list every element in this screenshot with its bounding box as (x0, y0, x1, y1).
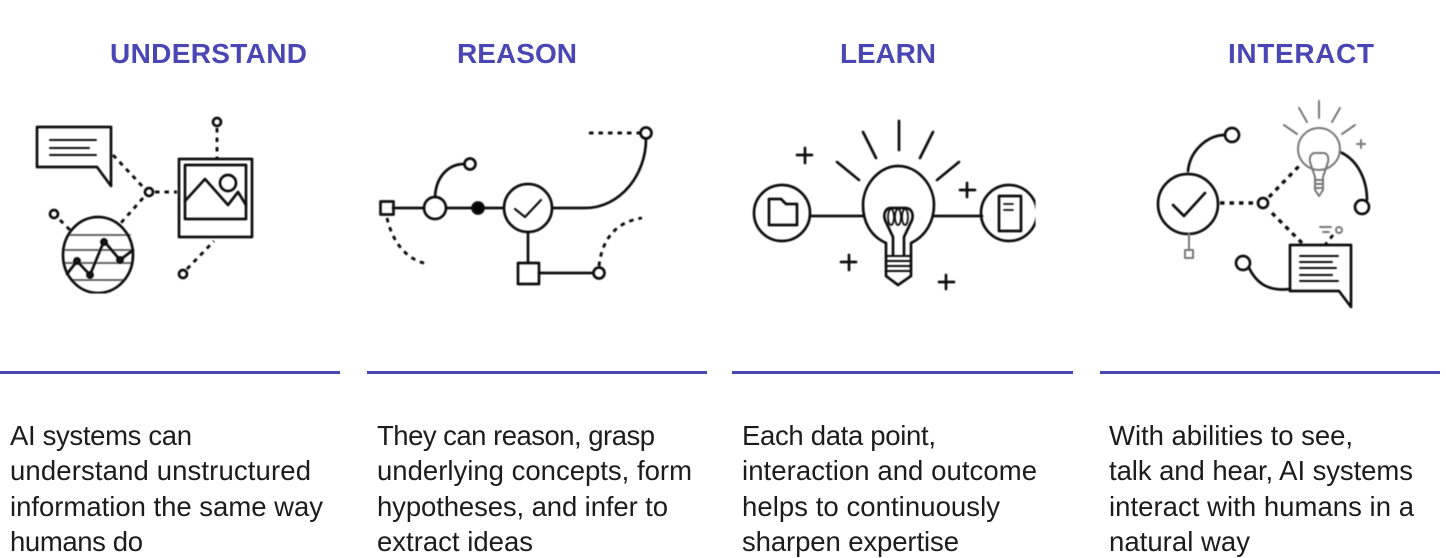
text: understand description (10, 420, 323, 557)
divider: learn (732, 371, 1073, 374)
text: understand description: AI systems can (10, 420, 192, 451)
text: reason description: underlying concepts, form (377, 455, 692, 486)
text: reason description: They can reason, grasp (377, 420, 655, 451)
text: reason description: extract ideas (377, 526, 533, 557)
icon: understand network (37, 118, 252, 293)
icon: reason flow (380, 128, 652, 284)
text: learn description (742, 420, 1037, 557)
text: learn description: Each data point, (742, 420, 936, 451)
text: interact description: talk and hear, AI systems (1109, 455, 1413, 486)
text: interact description: interact with humans in a (1109, 491, 1415, 522)
text: reason description (377, 420, 692, 557)
panel: interact (1100, 38, 1440, 557)
divider: understand (0, 371, 340, 374)
text: interact description: With abilities to see, (1109, 420, 1353, 451)
panel: learn (732, 38, 1073, 557)
icon: interact network (1158, 101, 1369, 307)
text: reason description: hypotheses, and infer to (377, 491, 668, 522)
text: learn description: sharpen expertise (742, 526, 959, 557)
icon: learn light bulb (754, 121, 1037, 289)
panel: understand (0, 38, 340, 557)
text: interact description (1109, 420, 1415, 557)
text: understand description: humans do (10, 526, 143, 557)
heading: understand: UNDERSTAND (110, 38, 307, 69)
text: understand description: information the same way (10, 491, 323, 522)
text: understand description: understand unstructured (10, 455, 311, 486)
heading: reason: REASON (457, 38, 577, 69)
text: learn description: interaction and outcome (742, 455, 1037, 486)
text: learn description: helps to continuously (742, 491, 1000, 522)
divider: interact (1100, 371, 1440, 374)
text: interact description: natural way (1109, 526, 1250, 557)
heading: interact: INTERACT (1228, 38, 1374, 69)
divider: reason (367, 371, 707, 374)
panel: reason (367, 38, 707, 557)
heading: learn: LEARN (840, 38, 936, 69)
